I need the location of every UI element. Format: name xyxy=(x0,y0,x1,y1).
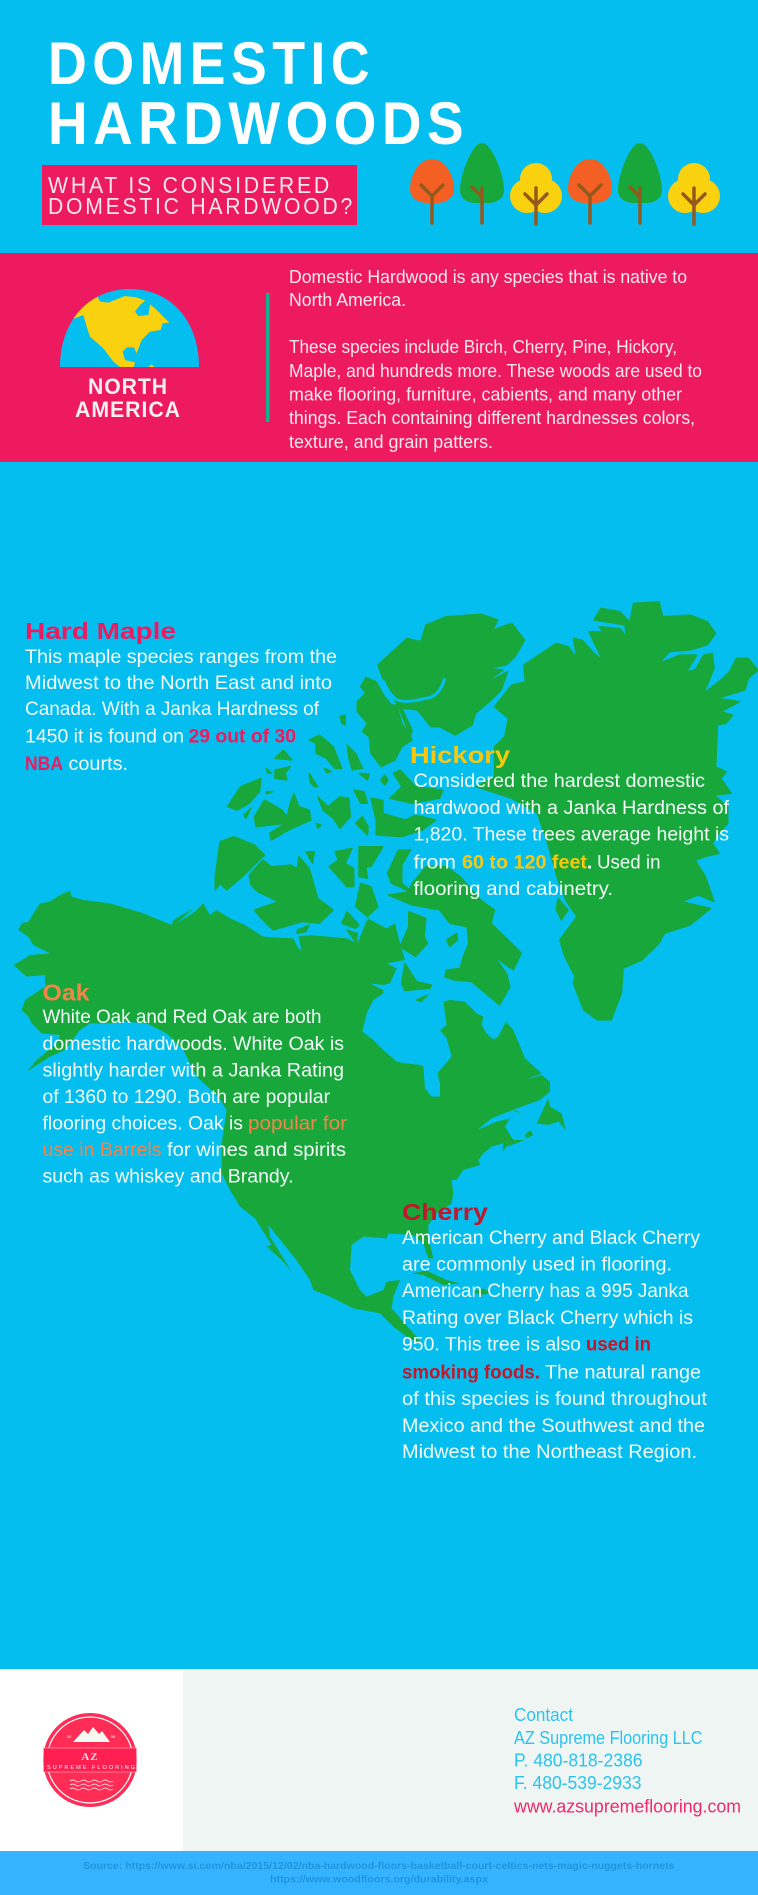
text block: Oak: White Oak and Red Oak are both xyxy=(42,1007,322,1028)
text block: Oak: popular for xyxy=(248,1114,348,1134)
text block: Hard Maple: Canada. With a Janka Hardness of xyxy=(25,699,320,720)
divider bar xyxy=(266,293,270,422)
text block: Cherry: Cherry xyxy=(402,1199,488,1225)
panel: definition band xyxy=(0,253,758,462)
text: sources: Source: https://www.si.com/nba/2015/12/02/nba-hardwood-floors-basketball-court-celtics-nets-magic-nuggets-hornets xyxy=(83,1860,675,1872)
text block: Cherry: American Cherry and Black Cherry xyxy=(402,1228,701,1249)
panel: sources band xyxy=(0,1851,758,1895)
logo: AZ Supreme Flooring: 09 xyxy=(111,1734,116,1739)
text block: Cherry: 950. This tree is also xyxy=(402,1334,581,1356)
text block: Cherry: smoking foods. xyxy=(402,1362,540,1384)
icon: row of trees xyxy=(410,143,720,224)
text block: Hard Maple: 29 out of 30 xyxy=(188,726,296,748)
text block: Cherry: Rating over Black Cherry which is xyxy=(402,1308,693,1329)
text block: Hickory: hardwood with a Janka Hardness of xyxy=(414,798,730,819)
text block: Oak: for wines and spirits xyxy=(167,1140,346,1161)
text block: Hard Maple: courts. xyxy=(68,754,128,775)
title: HARDWOODS xyxy=(48,90,469,157)
icon: green tree xyxy=(460,143,504,223)
logo: AZ Supreme Flooring: SUPREME FLOORING xyxy=(47,1765,135,1771)
text block: Hickory: flooring and cabinetry. xyxy=(414,879,613,900)
text: definition paragraph: Domestic Hardwood is any species that is native to xyxy=(289,267,687,287)
text: definition paragraph: things. Each containing different hardnesses colors, xyxy=(289,408,695,428)
text: contact details xyxy=(513,1704,741,1816)
label: North America: AMERICA xyxy=(75,397,181,422)
logo: AZ Supreme Flooring: 20 xyxy=(67,1734,72,1739)
text block: Cherry: Midwest to the Northeast Region. xyxy=(402,1442,697,1463)
text block: Hickory xyxy=(410,742,730,900)
text: contact details: www.azsupremeflooring.com xyxy=(513,1796,741,1816)
icon: green tree xyxy=(618,143,662,223)
text block: Hard Maple: This maple species ranges from the xyxy=(25,647,337,668)
text block: Hickory: from xyxy=(414,852,456,874)
text block: Cherry: Mexico and the Southwest and the xyxy=(402,1416,705,1437)
subtitle box: WHAT IS CONSIDERED xyxy=(48,172,332,198)
map: mainland North America xyxy=(13,891,566,1343)
text block: Hickory: 1,820. These trees average height is xyxy=(414,824,729,846)
map: Arctic islands and Greenland xyxy=(215,602,758,1020)
subtitle box xyxy=(42,165,357,225)
text block: Hickory: 60 to 120 feet xyxy=(462,852,588,874)
logo: AZ Supreme Flooring: AZ xyxy=(81,1751,99,1763)
text block: Hickory: Used in xyxy=(597,852,660,874)
subtitle box: DOMESTIC HARDWOOD? xyxy=(48,193,355,219)
text block: Oak: Oak xyxy=(42,980,90,1006)
icon: orange tree xyxy=(568,159,612,223)
text block: Oak: such as whiskey and Brandy. xyxy=(42,1166,294,1188)
logo: AZ Supreme Flooring xyxy=(43,1713,137,1807)
text: definition paragraph: make flooring, furniture, cabients, and many other xyxy=(289,384,682,404)
panel: footer contact xyxy=(0,1669,758,1852)
text block: Cherry: American Cherry has a 995 Janka xyxy=(402,1281,689,1302)
text block: Oak: flooring choices. Oak is xyxy=(42,1114,243,1134)
text block: Oak: use in Barrels xyxy=(42,1140,162,1161)
text block: Cherry: The natural range xyxy=(545,1362,701,1384)
label: North America xyxy=(75,374,181,422)
text block: Cherry: used in xyxy=(586,1334,651,1356)
title xyxy=(48,30,469,157)
map: North America and Greenland xyxy=(13,602,758,1343)
text: contact details: AZ Supreme Flooring LLC xyxy=(514,1727,702,1748)
text: sources: https://www.woodfloors.org/durability.aspx xyxy=(270,1874,488,1886)
text block: Hickory: . xyxy=(587,852,592,874)
label: North America: NORTH xyxy=(88,374,168,399)
text block: Hard Maple: Midwest to the North East and into xyxy=(25,673,332,694)
text block: Cherry: of this species is found throughout xyxy=(402,1389,708,1410)
icon: orange tree xyxy=(410,159,454,223)
text block: Hard Maple: 1450 it is found on xyxy=(25,726,184,748)
text block: Hickory: Hickory xyxy=(410,742,510,768)
text: sources xyxy=(83,1860,675,1886)
text block: Oak: slightly harder with a Janka Rating xyxy=(42,1060,344,1082)
title: DOMESTIC xyxy=(48,30,375,97)
text block: Oak: domestic hardwoods. White Oak is xyxy=(42,1034,344,1055)
text: definition paragraph: These species include Birch, Cherry, Pine, Hickory, xyxy=(289,337,677,357)
text block: Cherry xyxy=(402,1199,708,1463)
text: contact details: F. 480-539-2933 xyxy=(514,1772,642,1793)
text: definition paragraph: texture, and grain patters. xyxy=(289,432,493,452)
text block: Hard Maple: Hard Maple xyxy=(25,618,176,644)
icon: yellow tree xyxy=(668,163,720,224)
text block: Hickory: Considered the hardest domestic xyxy=(414,771,705,792)
text block: Hard Maple xyxy=(25,618,337,775)
text: definition paragraph: Maple, and hundreds more. These woods are used to xyxy=(289,361,702,381)
text block: Hard Maple: NBA xyxy=(25,754,63,775)
text: contact details: Contact xyxy=(514,1704,573,1725)
text block: Oak xyxy=(42,980,348,1188)
text: contact details: P. 480-818-2386 xyxy=(514,1750,642,1770)
text block: Cherry: are commonly used in flooring. xyxy=(402,1254,672,1276)
icon: globe xyxy=(60,289,199,368)
text block: Oak: of 1360 to 1290. Both are popular xyxy=(42,1087,331,1108)
text: definition paragraph xyxy=(289,267,702,452)
text: definition paragraph: North America. xyxy=(289,290,406,310)
icon: yellow tree xyxy=(510,163,562,224)
